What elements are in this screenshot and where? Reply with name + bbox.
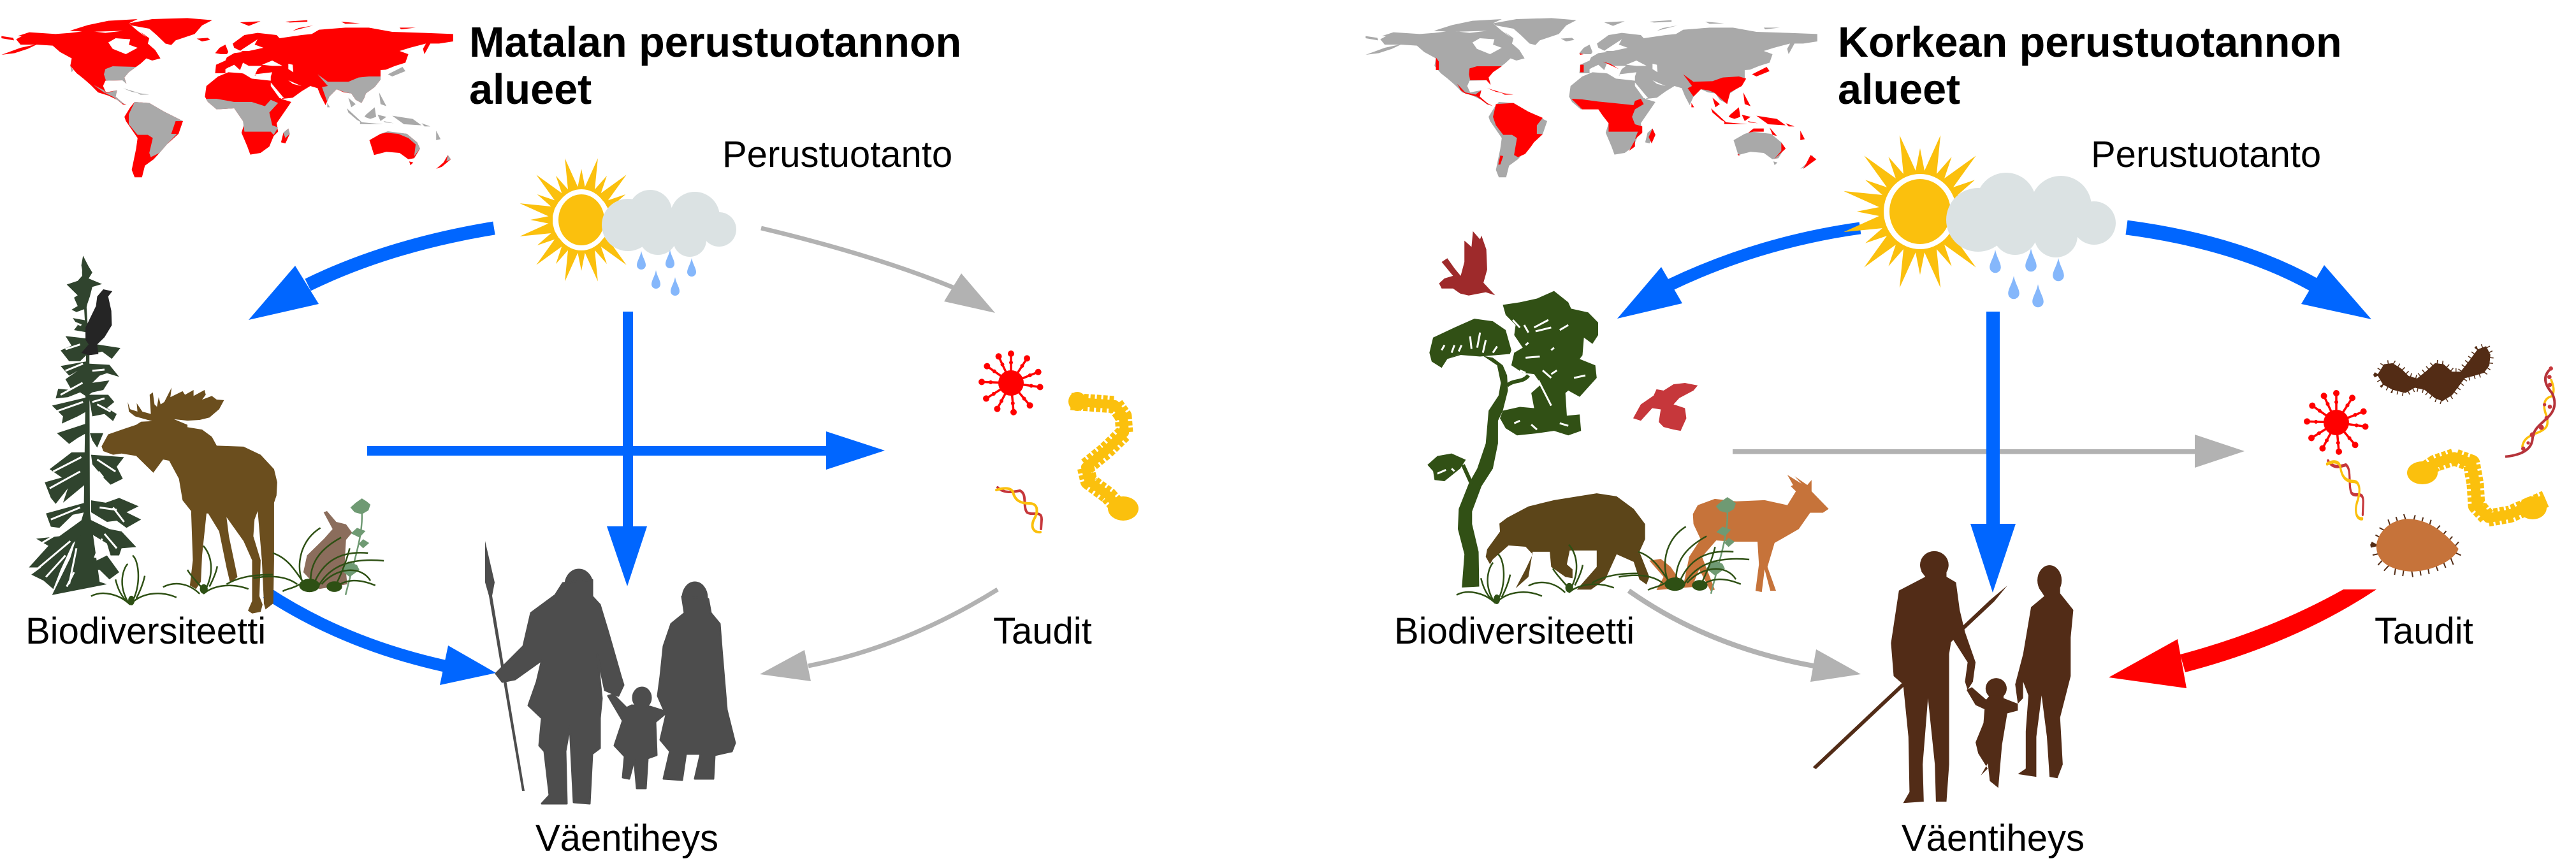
icon: DNA strand — [2327, 461, 2363, 519]
woman — [658, 582, 735, 780]
pathogens: virus, worm, DNA — [979, 350, 1139, 532]
pathogens: virus, worms, bacteria, DNA — [2304, 346, 2554, 572]
arrow: productivity to diseases — [761, 228, 995, 313]
woman — [2015, 565, 2073, 778]
world map: low productivity regions in red — [1, 18, 453, 177]
world map: high productivity regions in red — [1365, 18, 1817, 177]
arrow: productivity to population density — [1970, 312, 2016, 593]
icon: yellow worm — [2407, 457, 2547, 519]
panel: low primary productivity — [1, 18, 1139, 859]
small deer — [1649, 559, 1692, 590]
icon: red DNA strand — [2505, 366, 2554, 457]
title: high productivity: alueet — [1838, 66, 1960, 113]
antelope — [1684, 475, 1829, 592]
moose — [101, 387, 277, 614]
rabbit — [303, 511, 352, 589]
title: high productivity: Korkean perustuotannon — [1838, 19, 2342, 66]
icon: virus — [2304, 390, 2369, 455]
arrow: productivity to diseases — [2127, 227, 2371, 319]
bird: dark red — [1439, 231, 1495, 296]
label: Väentiheys: Väentiheys — [535, 818, 718, 859]
human family silhouette: brown — [1813, 551, 2073, 803]
man — [496, 570, 623, 804]
spruce tree — [29, 256, 141, 595]
arrow: biodiversity to diseases — [1733, 435, 2245, 468]
man — [1891, 551, 1976, 803]
tropical tree — [1427, 291, 1598, 588]
icon: sun — [518, 157, 644, 283]
title: low productivity — [469, 19, 961, 113]
spear — [485, 541, 525, 791]
icon: brown worm — [2377, 346, 2491, 401]
child — [1967, 678, 2018, 788]
bird: light red — [1633, 383, 1698, 431]
arrow: productivity to biodiversity — [249, 228, 494, 320]
icon: rain cloud — [602, 190, 736, 296]
label: Väentiheys: Väentiheys — [1902, 818, 2085, 859]
tapir — [1486, 493, 1649, 589]
icon: parasitic worm — [1068, 392, 1139, 521]
icon: sun — [1842, 133, 1998, 290]
label: Taudit: Taudit — [2375, 610, 2473, 652]
arrow: biodiversity to population density — [266, 593, 496, 685]
human family silhouette: grey — [485, 541, 735, 804]
icon: DNA strand — [996, 487, 1042, 532]
icon: rain cloud — [1946, 173, 2116, 307]
label: Perustuotanto: Perustuotanto — [2091, 134, 2321, 175]
arrow: diseases to population density — [760, 589, 998, 681]
bird: black grouse on spruce — [82, 289, 112, 355]
arrow: productivity to biodiversity — [1617, 228, 1860, 319]
arrow: productivity to population density — [607, 312, 647, 586]
title: low productivity: Matalan perustuotannon — [469, 19, 961, 66]
title: low productivity: alueet — [469, 66, 592, 113]
label: Taudit: Taudit — [993, 610, 1092, 652]
icon: virus — [979, 350, 1044, 415]
plants and grass — [1457, 497, 1749, 604]
label: Biodiversiteetti: Biodiversiteetti — [25, 610, 266, 652]
arrow: diseases to population density — [2109, 589, 2376, 688]
label: Perustuotanto: Perustuotanto — [722, 134, 952, 175]
arrow: biodiversity to diseases — [367, 431, 885, 470]
label: Biodiversiteetti: Biodiversiteetti — [1394, 610, 1634, 652]
spear — [1813, 586, 2007, 769]
icon: spiked bacterium — [2376, 519, 2459, 572]
plants and grass — [91, 498, 384, 605]
arrow: biodiversity to population density — [1629, 591, 1861, 682]
title: high productivity — [1838, 19, 2342, 113]
child — [608, 688, 667, 788]
panel: high primary productivity — [1365, 18, 2554, 859]
